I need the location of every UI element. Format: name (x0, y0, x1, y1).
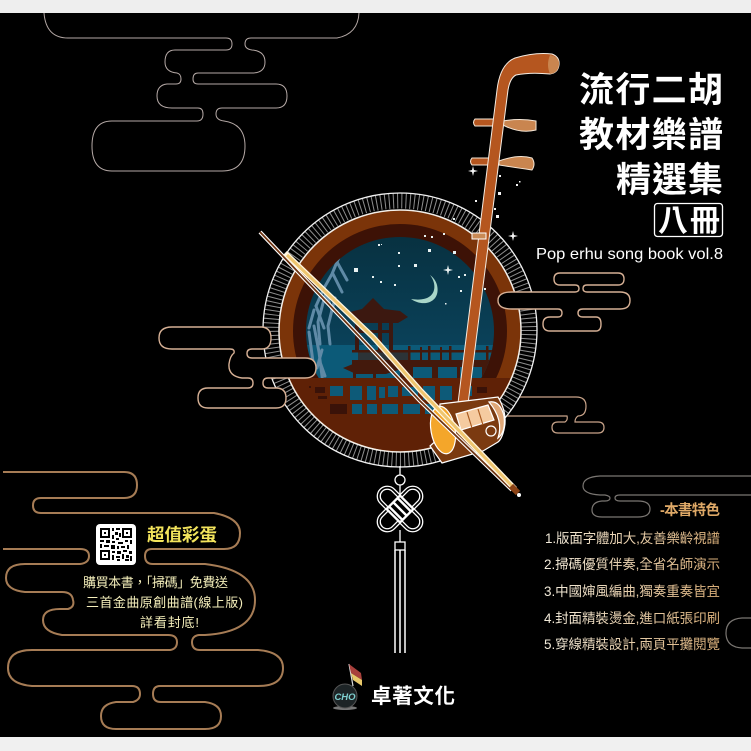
bow (260, 232, 521, 497)
title: 教材樂譜 (579, 116, 723, 155)
cloud: upper right of medallion (498, 273, 630, 331)
publisher logo icon (333, 664, 362, 710)
foreground bridge (290, 378, 510, 451)
volume badge: 八冊 (658, 205, 720, 238)
features list (544, 530, 720, 652)
bonus text (83, 575, 243, 630)
pavilion (350, 298, 408, 350)
night scene (306, 237, 494, 378)
willow tree (309, 248, 347, 384)
bonus text: 購買本書，「掃碼」免費送 (83, 575, 228, 590)
features list: 4.封面精裝燙金,進口紙張印刷 (544, 611, 720, 626)
features list: 5.穿線精裝設計,兩頁平攤閱覽 (544, 637, 720, 652)
bridge railing (343, 346, 497, 379)
bonus text: 詳看封底! (140, 615, 199, 630)
erhu instrument (427, 54, 559, 463)
features list: 1.版面字體加大,友善樂齡視譜 (545, 530, 720, 546)
cloud outline: lower right corner (726, 618, 751, 648)
bonus heading: 超值彩蛋 (147, 525, 218, 545)
features heading: -本書特色 (660, 501, 720, 519)
qr code (96, 524, 136, 565)
title (579, 71, 723, 200)
nut clip (472, 233, 486, 239)
tick ring (271, 201, 529, 459)
resonator drum (427, 397, 505, 463)
publisher name: 卓著文化 (371, 684, 455, 708)
cloud outline: top left (44, 13, 359, 171)
title: 流行二胡 (579, 71, 723, 110)
tuning pegs (470, 119, 536, 170)
publisher logo icon: CHO (334, 692, 356, 703)
neck and head (458, 54, 559, 404)
features list: 3.中國婶風編曲,獨奏重奏皆宜 (544, 584, 720, 599)
cloud: lower right of medallion (507, 397, 604, 433)
cloud outline: upper right corner (583, 476, 751, 517)
features list: 2.掃碼優質伴奏,全省名師演示 (544, 556, 720, 572)
central medallion (263, 166, 537, 468)
cloud: left of medallion (159, 327, 316, 408)
cloud outline: lower left (3, 472, 283, 729)
moon and stars (354, 166, 520, 304)
title: 精選集 (616, 161, 723, 200)
bonus text: 三首金曲原創曲譜(線上版) (86, 595, 243, 610)
english subtitle: Pop erhu song book vol.8 (536, 246, 723, 263)
chinese knot pendant (360, 466, 440, 653)
